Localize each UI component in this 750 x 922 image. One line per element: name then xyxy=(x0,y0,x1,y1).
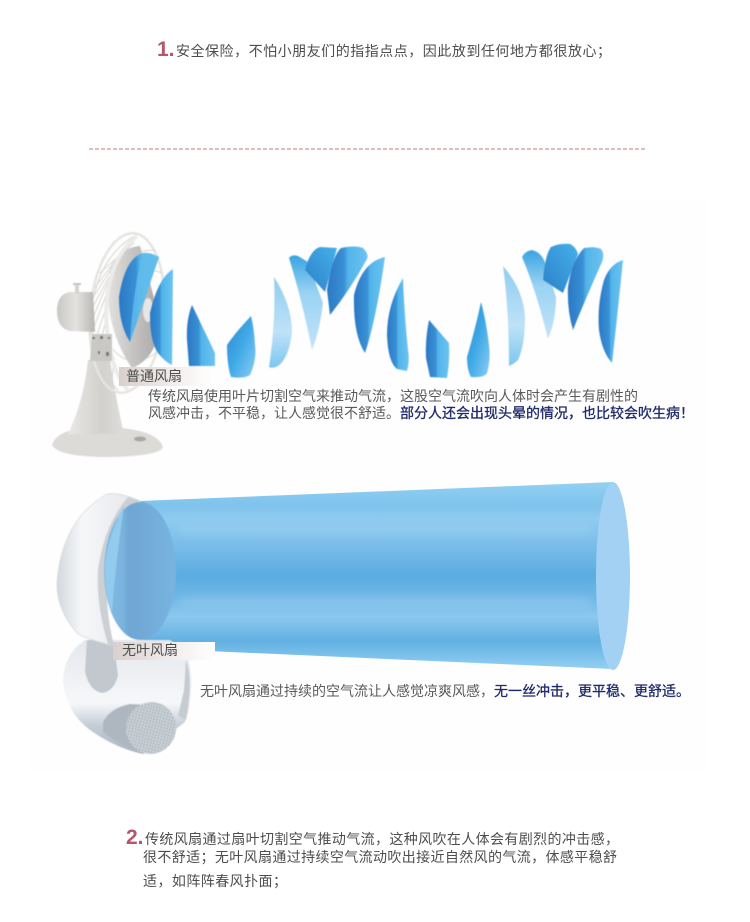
text: ordinary fan description: 风感冲击，不平稳，让人感觉很不舒适。 xyxy=(148,405,400,421)
fan guard xyxy=(83,230,171,396)
bladeless fan neck xyxy=(85,640,118,693)
air column xyxy=(140,482,630,670)
blade 14 xyxy=(522,250,556,339)
blade 8 xyxy=(327,246,368,315)
blade 2 xyxy=(150,269,173,365)
label: bladeless fan xyxy=(113,642,215,660)
blade 17 xyxy=(599,260,623,363)
point 2 text: 传统风扇通过扇叶切割空气推动气流，这种风吹在人体会有剧烈的冲击感， xyxy=(145,831,619,847)
text: ordinary fan description: 部分人还会出现头晕的情况，也比较会吹生病！ xyxy=(400,405,694,421)
blade 15 xyxy=(543,244,578,293)
bladeless fan ring xyxy=(57,494,140,646)
point 1 text: 1. xyxy=(157,38,175,61)
blade 6 xyxy=(289,255,323,350)
blade 13 xyxy=(503,266,525,366)
fan motor xyxy=(57,292,95,332)
text: ordinary fan description: 传统风扇使用叶片切割空气来推动气流，这股空气流吹向人体时会产生有剧性的 xyxy=(148,388,638,404)
label: ordinary fan: 普通风扇 xyxy=(126,368,182,384)
fan base xyxy=(52,428,163,457)
label: bladeless fan: 无叶风扇 xyxy=(122,642,178,658)
blade 7 xyxy=(305,247,337,292)
point 2 text: 2. xyxy=(126,826,144,849)
blade 5 xyxy=(269,277,292,368)
bladeless fan speaker xyxy=(103,704,150,750)
fan rim xyxy=(106,236,137,390)
point 1 text xyxy=(157,38,611,61)
fan hub xyxy=(108,246,160,368)
blade 9 xyxy=(354,257,385,353)
text: bladeless fan description xyxy=(200,683,690,699)
text: bladeless fan description: 无叶风扇通过持续的空气流让人感觉凉爽风感， xyxy=(200,683,494,699)
blade 11 xyxy=(426,320,449,378)
air column end xyxy=(596,482,630,670)
icon: traditional desk fan xyxy=(52,230,171,457)
icon: bladeless fan xyxy=(57,494,192,760)
blade 16 xyxy=(568,247,603,330)
point 2 text: 很不舒适；无叶风扇通过持续空气流动吹出接近自然风的气流，体感平稳舒 xyxy=(143,849,617,866)
fan stand xyxy=(68,360,124,434)
blade 4 xyxy=(227,316,255,378)
bladeless fan opening xyxy=(104,502,176,640)
bladeless fan base xyxy=(63,640,192,754)
fan joint xyxy=(90,334,112,361)
point 2 text: 适，如阵阵春风扑面； xyxy=(143,873,287,890)
point 2 text xyxy=(126,826,619,890)
panel: fan comparison background xyxy=(30,200,706,770)
blade 10 xyxy=(387,278,409,371)
blade 1 xyxy=(119,253,159,342)
blade 12 xyxy=(467,302,490,377)
blade 3 xyxy=(187,305,215,366)
chopped air blades xyxy=(119,244,623,378)
label: ordinary fan xyxy=(119,367,213,386)
text: bladeless fan description: 无一丝冲击，更平稳、更舒适。 xyxy=(494,683,690,699)
text: ordinary fan description xyxy=(148,388,694,421)
point 1 text: 安全保险，不怕小朋友们的指指点点，因此放到任何地方都很放心； xyxy=(176,43,611,60)
